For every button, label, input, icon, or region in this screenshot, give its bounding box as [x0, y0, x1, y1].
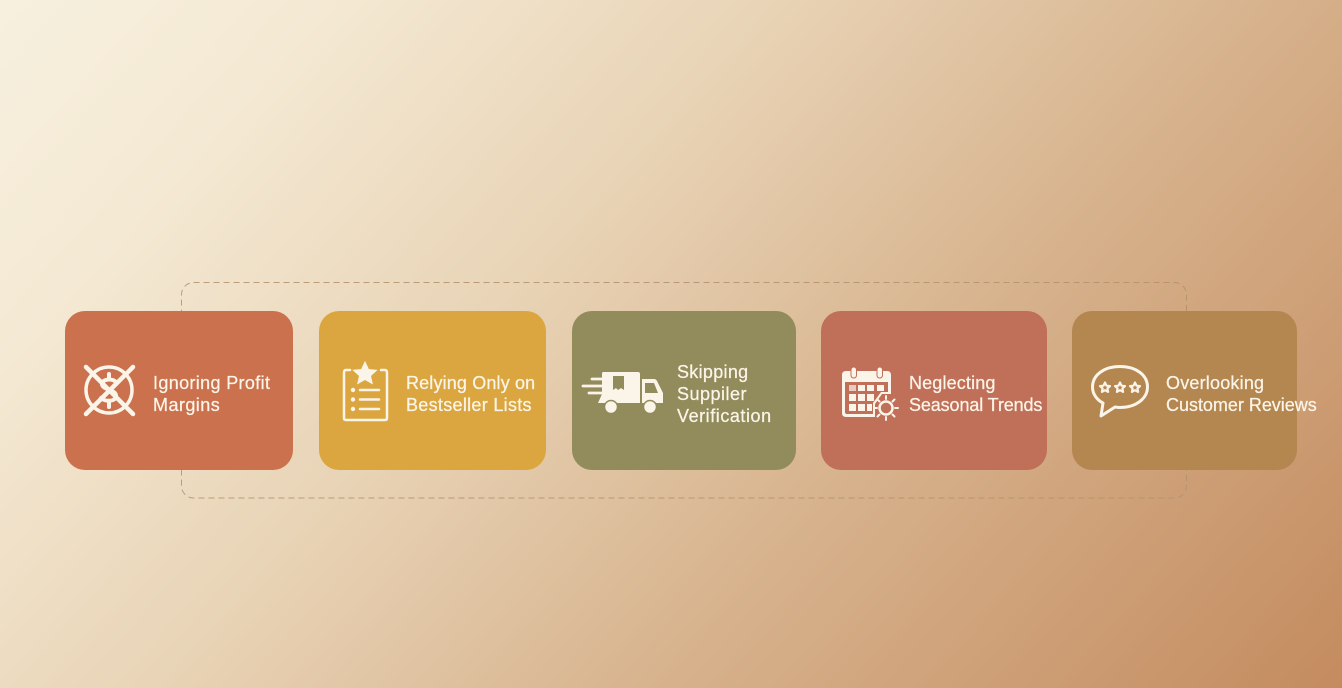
card: overlooking customer reviews	[1072, 311, 1297, 470]
label: Ignoring Profit	[153, 373, 270, 393]
label	[676, 362, 772, 426]
card: neglecting seasonal trends	[821, 311, 1047, 470]
label: Suppiler	[677, 384, 747, 404]
label: Verification	[677, 406, 772, 426]
card: skipping supplier verification	[572, 311, 796, 470]
dashed connector frame	[181, 282, 1187, 498]
label: Overlooking	[1166, 373, 1264, 393]
label: Customer Reviews	[1166, 395, 1317, 415]
label: Relying Only on	[406, 373, 535, 393]
label: Margins	[153, 395, 220, 415]
label	[406, 373, 535, 415]
icon: delivery truck	[582, 372, 663, 413]
card: ignoring profit margins	[65, 311, 293, 470]
icon: crossed-out coin	[84, 364, 136, 416]
label	[1166, 373, 1317, 415]
label: Seasonal Trends	[909, 395, 1042, 415]
label: Skipping	[677, 362, 748, 382]
label: Neglecting	[909, 373, 996, 393]
label	[153, 373, 270, 416]
icon: calendar with sun	[842, 368, 899, 421]
card: relying only on bestseller lists	[319, 311, 546, 470]
label: Bestseller Lists	[406, 395, 532, 415]
label	[909, 373, 1042, 415]
icon: clipboard with star	[342, 361, 388, 422]
icon: speech bubble with stars	[1091, 365, 1149, 418]
